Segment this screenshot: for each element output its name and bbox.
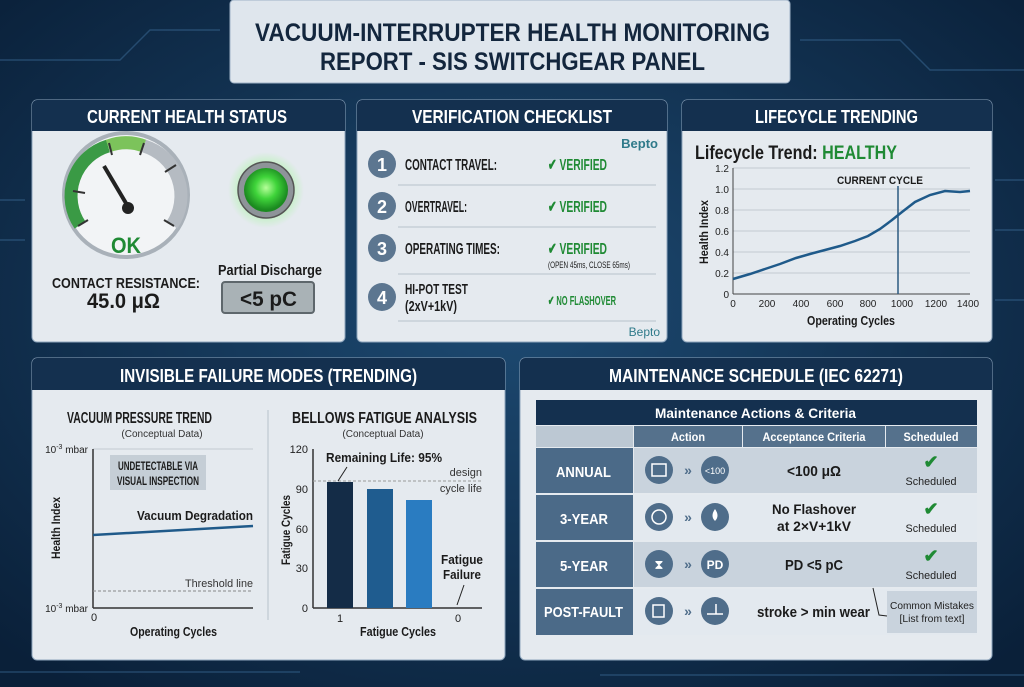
- row: annual: <100: [705, 466, 725, 476]
- row: annual: Scheduled: [906, 476, 956, 488]
- item 2: 2: [377, 197, 387, 217]
- panel: current health status: CURRENT HEALTH STATUS: [87, 107, 287, 127]
- item 3: 3: [377, 239, 387, 259]
- chart: vacuum pressure trend: VACUUM PRESSURE TREND: [67, 410, 212, 427]
- text: contact resistance: CONTACT RESISTANCE:: [52, 275, 200, 292]
- row: 3-year: »: [684, 509, 692, 525]
- icon: green LED: [228, 152, 304, 228]
- title: VACUUM-INTERRUPTER HEALTH MONITORING: [255, 19, 770, 47]
- callout: undetectable: [110, 455, 206, 490]
- table: Maintenance Actions & Criteria: [655, 405, 856, 421]
- row: 3-year: [536, 495, 977, 540]
- chart: vacuum pressure trend: Vacuum Degradation: [137, 508, 253, 523]
- chart: bellows fatigue: 120: [290, 444, 308, 456]
- item 1: ✔ VERIFIED: [548, 157, 607, 174]
- line chart: health index: CURRENT CYCLE: [837, 175, 923, 187]
- row: annual: ✔: [923, 452, 939, 472]
- line chart: health index: Health Index: [697, 200, 711, 264]
- chart: bellows fatigue: 1: [337, 613, 343, 625]
- row: 5-year: 5-YEAR: [560, 558, 608, 575]
- chart: bellows fatigue: Failure: [443, 567, 481, 582]
- panel: verification checklist: [357, 100, 667, 342]
- row: 5-year: ⧗: [654, 557, 664, 572]
- callout: undetectable: VISUAL INSPECTION: [117, 474, 199, 488]
- chart: bellows fatigue: cycle life: [440, 483, 482, 495]
- line chart: health index: 0.6: [715, 227, 729, 238]
- chart: vacuum pressure trend: [45, 410, 253, 639]
- line chart: health index: 0: [730, 299, 736, 310]
- item 4: HI-POT TEST: [405, 281, 468, 298]
- line chart: health index: [697, 164, 980, 328]
- item 3: ✔ VERIFIED: [548, 241, 607, 258]
- line chart: health index: 0.8: [715, 206, 729, 217]
- table: Scheduled: [904, 430, 958, 444]
- item 3: OPERATING TIMES:: [405, 241, 500, 258]
- text: contact resistance: 45.0 μΩ: [87, 290, 160, 313]
- line chart: health index: 600: [827, 299, 844, 310]
- panel: verification checklist: Bepto: [629, 325, 660, 339]
- chart: vacuum pressure trend: mbar: [62, 445, 89, 456]
- table: Action: [671, 430, 705, 444]
- chart: bellows fatigue: Fatigue: [441, 552, 483, 567]
- chart: bellows fatigue: 0: [302, 603, 308, 615]
- panel: maintenance schedule: [520, 358, 992, 660]
- line chart: health index: 1.2: [715, 164, 729, 175]
- partial discharge readout: <5 pC: [240, 288, 297, 311]
- chart: bellows fatigue: BELLOWS FATIGUE ANALYSIS: [292, 410, 477, 427]
- row: 3-year: No Flashover: [772, 501, 857, 517]
- callout: undetectable: UNDETECTABLE VIA: [118, 459, 198, 473]
- item 4: ✔ NO FLASHOVER: [548, 293, 616, 308]
- panel: invisible failure modes: INVISIBLE FAILURE MODES (TRENDING): [120, 366, 417, 386]
- row: post-fault: »: [684, 603, 692, 619]
- chart: bellows fatigue: Fatigue Cycles: [360, 624, 436, 639]
- panel: verification checklist: VERIFICATION CHECKLIST: [412, 107, 612, 127]
- table: Acceptance Criteria: [762, 430, 866, 444]
- chart: vacuum pressure trend: mbar: [62, 604, 89, 615]
- item 1: CONTACT TRAVEL:: [405, 157, 497, 174]
- chart: bellows fatigue: 60: [296, 524, 308, 536]
- panel: lifecycle trending: Lifecycle Trend: HEALTHY: [695, 143, 897, 164]
- icon: gauge: [64, 133, 188, 258]
- row: 5-year: PD: [707, 558, 724, 572]
- partial discharge readout: Partial Discharge: [218, 262, 322, 279]
- line chart: health index: 1.0: [715, 185, 729, 196]
- chart: vacuum pressure trend: 10: [45, 445, 56, 456]
- row: 3-year: 3-YEAR: [560, 511, 608, 528]
- row: annual: <100 μΩ: [787, 463, 841, 480]
- chart: bellows fatigue: [279, 410, 483, 639]
- chart: vacuum pressure trend: -3: [56, 603, 63, 610]
- row: 3-year: Scheduled: [906, 523, 956, 535]
- chart: bellows fatigue: 30: [296, 563, 308, 575]
- chart: bellows fatigue: Remaining Life: 95%: [326, 450, 442, 465]
- panel: verification checklist: Bepto: [621, 136, 658, 151]
- line chart: health index: 0.4: [715, 248, 729, 259]
- chart: vacuum pressure trend: Operating Cycles: [130, 624, 217, 639]
- line chart: health index: 800: [860, 299, 877, 310]
- icon: gauge: OK: [111, 233, 141, 258]
- row: post-fault: POST-FAULT: [544, 604, 623, 621]
- panel: lifecycle trending: [682, 100, 992, 342]
- row: post-fault: Common Mistakes: [890, 601, 974, 612]
- panel: invisible failure modes: [32, 358, 505, 660]
- title: [230, 0, 790, 83]
- chart: vacuum pressure trend: Threshold line: [185, 578, 253, 590]
- item 1: [368, 150, 607, 178]
- row: annual: »: [684, 462, 692, 478]
- chart: vacuum pressure trend: -3: [56, 444, 63, 451]
- row: 3-year: ✔: [923, 499, 939, 519]
- panel: current health status: [32, 100, 345, 342]
- chart: vacuum pressure trend: (Conceptual Data): [121, 429, 203, 440]
- item 3: (OPEN 45ms, CLOSE 65ms): [548, 260, 630, 270]
- line chart: health index: Operating Cycles: [807, 313, 895, 328]
- chart: vacuum pressure trend: 10: [45, 604, 56, 615]
- line chart: health index: 200: [759, 299, 776, 310]
- row: 5-year: [536, 542, 977, 587]
- row: post-fault: [List from text]: [900, 614, 965, 625]
- line chart: health index: 1200: [925, 299, 948, 310]
- row: 5-year: ✔: [923, 546, 939, 566]
- line chart: health index: 0: [723, 290, 729, 301]
- row: 5-year: Scheduled: [906, 570, 956, 582]
- chart: vacuum pressure trend: Health Index: [49, 497, 63, 559]
- row: annual: ANNUAL: [556, 464, 611, 481]
- chart: bellows fatigue: (Conceptual Data): [342, 429, 424, 440]
- row: 5-year: »: [684, 556, 692, 572]
- title: REPORT - SIS SWITCHGEAR PANEL: [320, 48, 705, 76]
- item 3: [368, 234, 630, 270]
- item 4: 4: [377, 288, 387, 308]
- line chart: health index: 1400: [957, 299, 980, 310]
- text: contact resistance: [52, 275, 200, 313]
- panel: maintenance schedule: MAINTENANCE SCHEDULE (IEC 62271): [609, 366, 903, 386]
- line chart: health index: 1000: [891, 299, 914, 310]
- item 2: ✔ VERIFIED: [548, 199, 607, 216]
- line chart: health index: 0.2: [715, 269, 729, 280]
- item 2: [368, 192, 607, 220]
- item 2: OVERTRAVEL:: [405, 199, 467, 216]
- table: [536, 400, 977, 635]
- panel: lifecycle trending: LIFECYCLE TRENDING: [755, 107, 918, 127]
- item 4: [368, 281, 616, 315]
- partial discharge readout: [218, 262, 322, 313]
- row: post-fault: [536, 588, 977, 635]
- item 1: 1: [377, 155, 387, 175]
- chart: bellows fatigue: Fatigue Cycles: [279, 495, 293, 565]
- row: 5-year: PD <5 pC: [785, 557, 843, 574]
- chart: vacuum pressure trend: 0: [91, 612, 97, 624]
- chart: bellows fatigue: 0: [455, 613, 461, 625]
- row: annual: [536, 448, 977, 493]
- row: 3-year: at 2×V+1kV: [777, 518, 852, 534]
- item 4: (2xV+1kV): [405, 298, 457, 315]
- row: post-fault: stroke > min wear: [757, 604, 870, 621]
- chart: bellows fatigue: design: [450, 467, 482, 479]
- line chart: health index: 400: [793, 299, 810, 310]
- chart: bellows fatigue: 90: [296, 484, 308, 496]
